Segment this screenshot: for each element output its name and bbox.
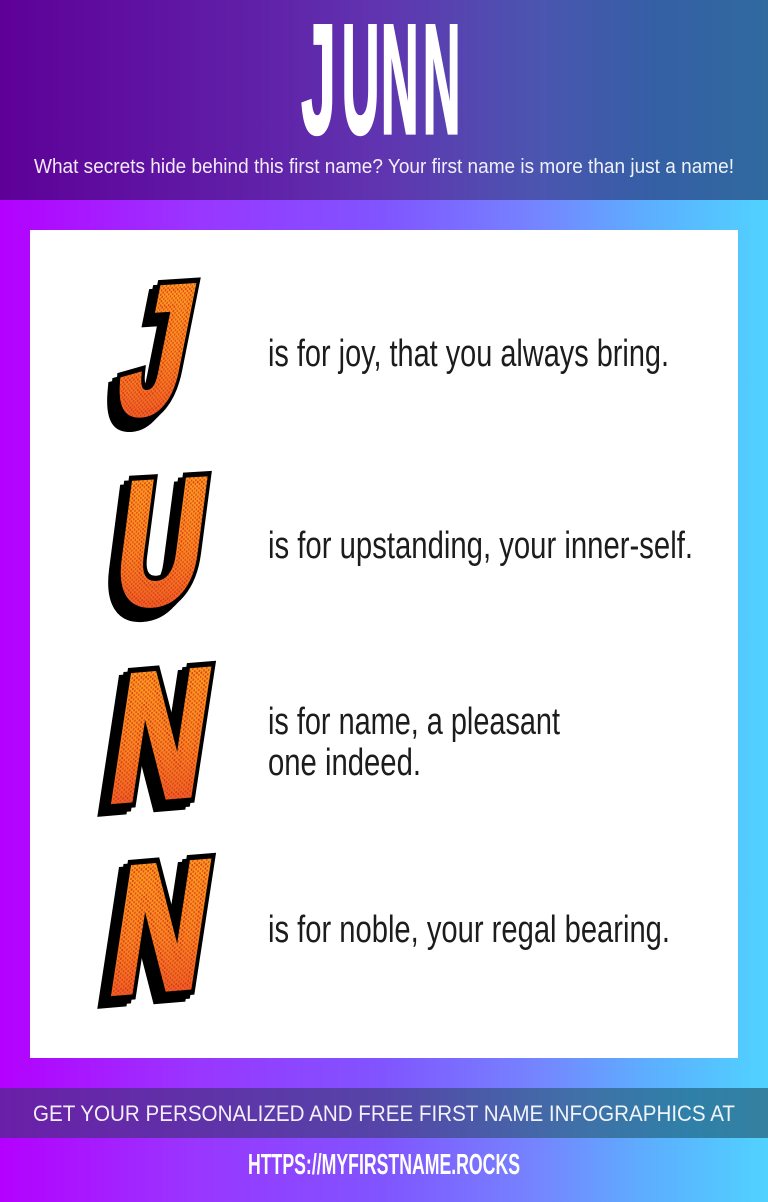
footer call to action: GET YOUR PERSONALIZED AND FREE FIRST NAME INFOGRAPHICS AT bbox=[33, 1101, 735, 1126]
icon: comic letter U: U bbox=[106, 442, 217, 642]
icon: comic letter N: N bbox=[100, 631, 223, 840]
footer band bbox=[0, 1088, 768, 1138]
icon: comic letter N second: N bbox=[100, 823, 223, 1032]
icon: comic letter J: J bbox=[106, 248, 209, 453]
icon: comic letter N second: N bbox=[100, 823, 223, 1032]
icon: comic letter U: U bbox=[101, 447, 212, 647]
footer URL: HTTPS://MYFIRSTNAME.ROCKS bbox=[248, 1149, 520, 1181]
icon: comic letter U: U bbox=[97, 451, 208, 651]
text: first N line bbox=[268, 701, 560, 784]
subtitle: What secrets hide behind this first name? Your first name is more than just a name! bbox=[34, 156, 734, 178]
title bbox=[301, 0, 461, 167]
icon: comic letter N second: N bbox=[100, 823, 223, 1032]
icon: comic letter J: J bbox=[106, 248, 209, 453]
icon: comic letter J: J bbox=[97, 257, 200, 462]
icon: comic letter N: N bbox=[100, 631, 223, 840]
icon: comic letter U: U bbox=[106, 442, 217, 642]
icon: comic letter N: N bbox=[95, 635, 218, 844]
icon: comic letter N: N bbox=[100, 631, 223, 840]
text: first N line: one indeed. bbox=[268, 742, 421, 784]
icon: comic letter N second: N bbox=[95, 827, 218, 1036]
text: first N line: is for name, a pleasant bbox=[268, 701, 560, 743]
panel: white letter meanings bbox=[30, 230, 738, 1058]
icon: comic letter J: J bbox=[101, 253, 204, 458]
header band bbox=[0, 0, 768, 200]
icon: comic letter U: U bbox=[106, 442, 217, 642]
icon: comic letter N second: N bbox=[91, 830, 214, 1039]
icon: comic letter N: N bbox=[91, 638, 214, 847]
icon: comic letter J: J bbox=[106, 248, 209, 453]
